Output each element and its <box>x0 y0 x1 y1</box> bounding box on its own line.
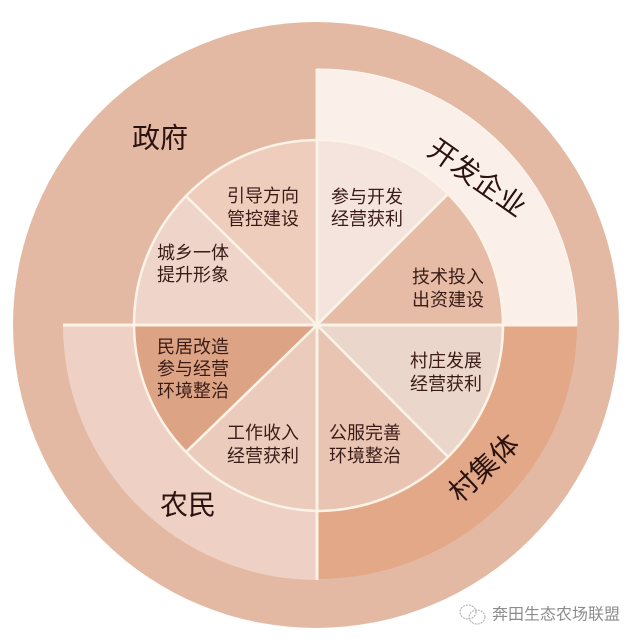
heading: farmers: 农民 <box>160 490 216 520</box>
icon: chat bubbles <box>460 605 485 624</box>
label: guide and control: 引导方向 <box>227 186 299 206</box>
panel: developer quadrant <box>317 69 577 325</box>
label: housing renovation <box>157 337 229 401</box>
watermark: 奔田生态农场联盟 <box>492 606 620 624</box>
wedge: work income <box>186 325 317 511</box>
inner pie chart <box>134 140 503 511</box>
label: village development: 经营获利 <box>410 374 482 394</box>
label: work income <box>227 423 299 466</box>
label: village development: 村庄发展 <box>410 351 482 371</box>
label: technology investment: 技术投入 <box>412 267 484 287</box>
wedge: guide and control <box>186 140 317 325</box>
label: participate in development: 参与开发 <box>331 187 403 207</box>
label: technology investment <box>412 267 484 310</box>
label: work income: 工作收入 <box>227 423 299 443</box>
label: public services: 环境整治 <box>329 446 401 466</box>
label: urban-rural integration: 城乡一体 <box>157 243 229 263</box>
label: housing renovation: 民居改造 <box>157 337 229 357</box>
label: housing renovation: 参与经营 <box>157 359 229 379</box>
heading: government: 政府 <box>132 122 188 154</box>
label: work income: 经营获利 <box>227 446 299 466</box>
wedge: public services <box>317 325 448 511</box>
label: participate in development <box>331 187 403 229</box>
heading: developer: 开发企业 <box>422 133 532 223</box>
quadrant dividing lines <box>63 69 577 580</box>
label: guide and control <box>227 186 299 229</box>
label: housing renovation: 环境整治 <box>157 381 229 401</box>
panel: farmers quadrant <box>63 325 317 580</box>
label: public services <box>329 423 401 466</box>
wedge: housing renovation <box>134 325 317 452</box>
label: urban-rural integration: 提升形象 <box>157 265 229 285</box>
label: technology investment: 出资建设 <box>412 290 484 310</box>
label: village development <box>410 351 482 394</box>
heading: village collective: 村集体 <box>443 428 525 508</box>
wedge: village development <box>317 325 503 457</box>
wedge: urban-rural integration <box>134 196 317 325</box>
label: participate in development: 经营获利 <box>331 209 403 229</box>
label: public services: 公服完善 <box>329 423 401 443</box>
panel: village collective quadrant <box>317 325 577 579</box>
label: guide and control: 管控建设 <box>227 209 299 229</box>
wedge: technology investment <box>317 194 503 325</box>
wedge: participate in development <box>317 140 448 325</box>
label: urban-rural integration <box>157 243 229 285</box>
